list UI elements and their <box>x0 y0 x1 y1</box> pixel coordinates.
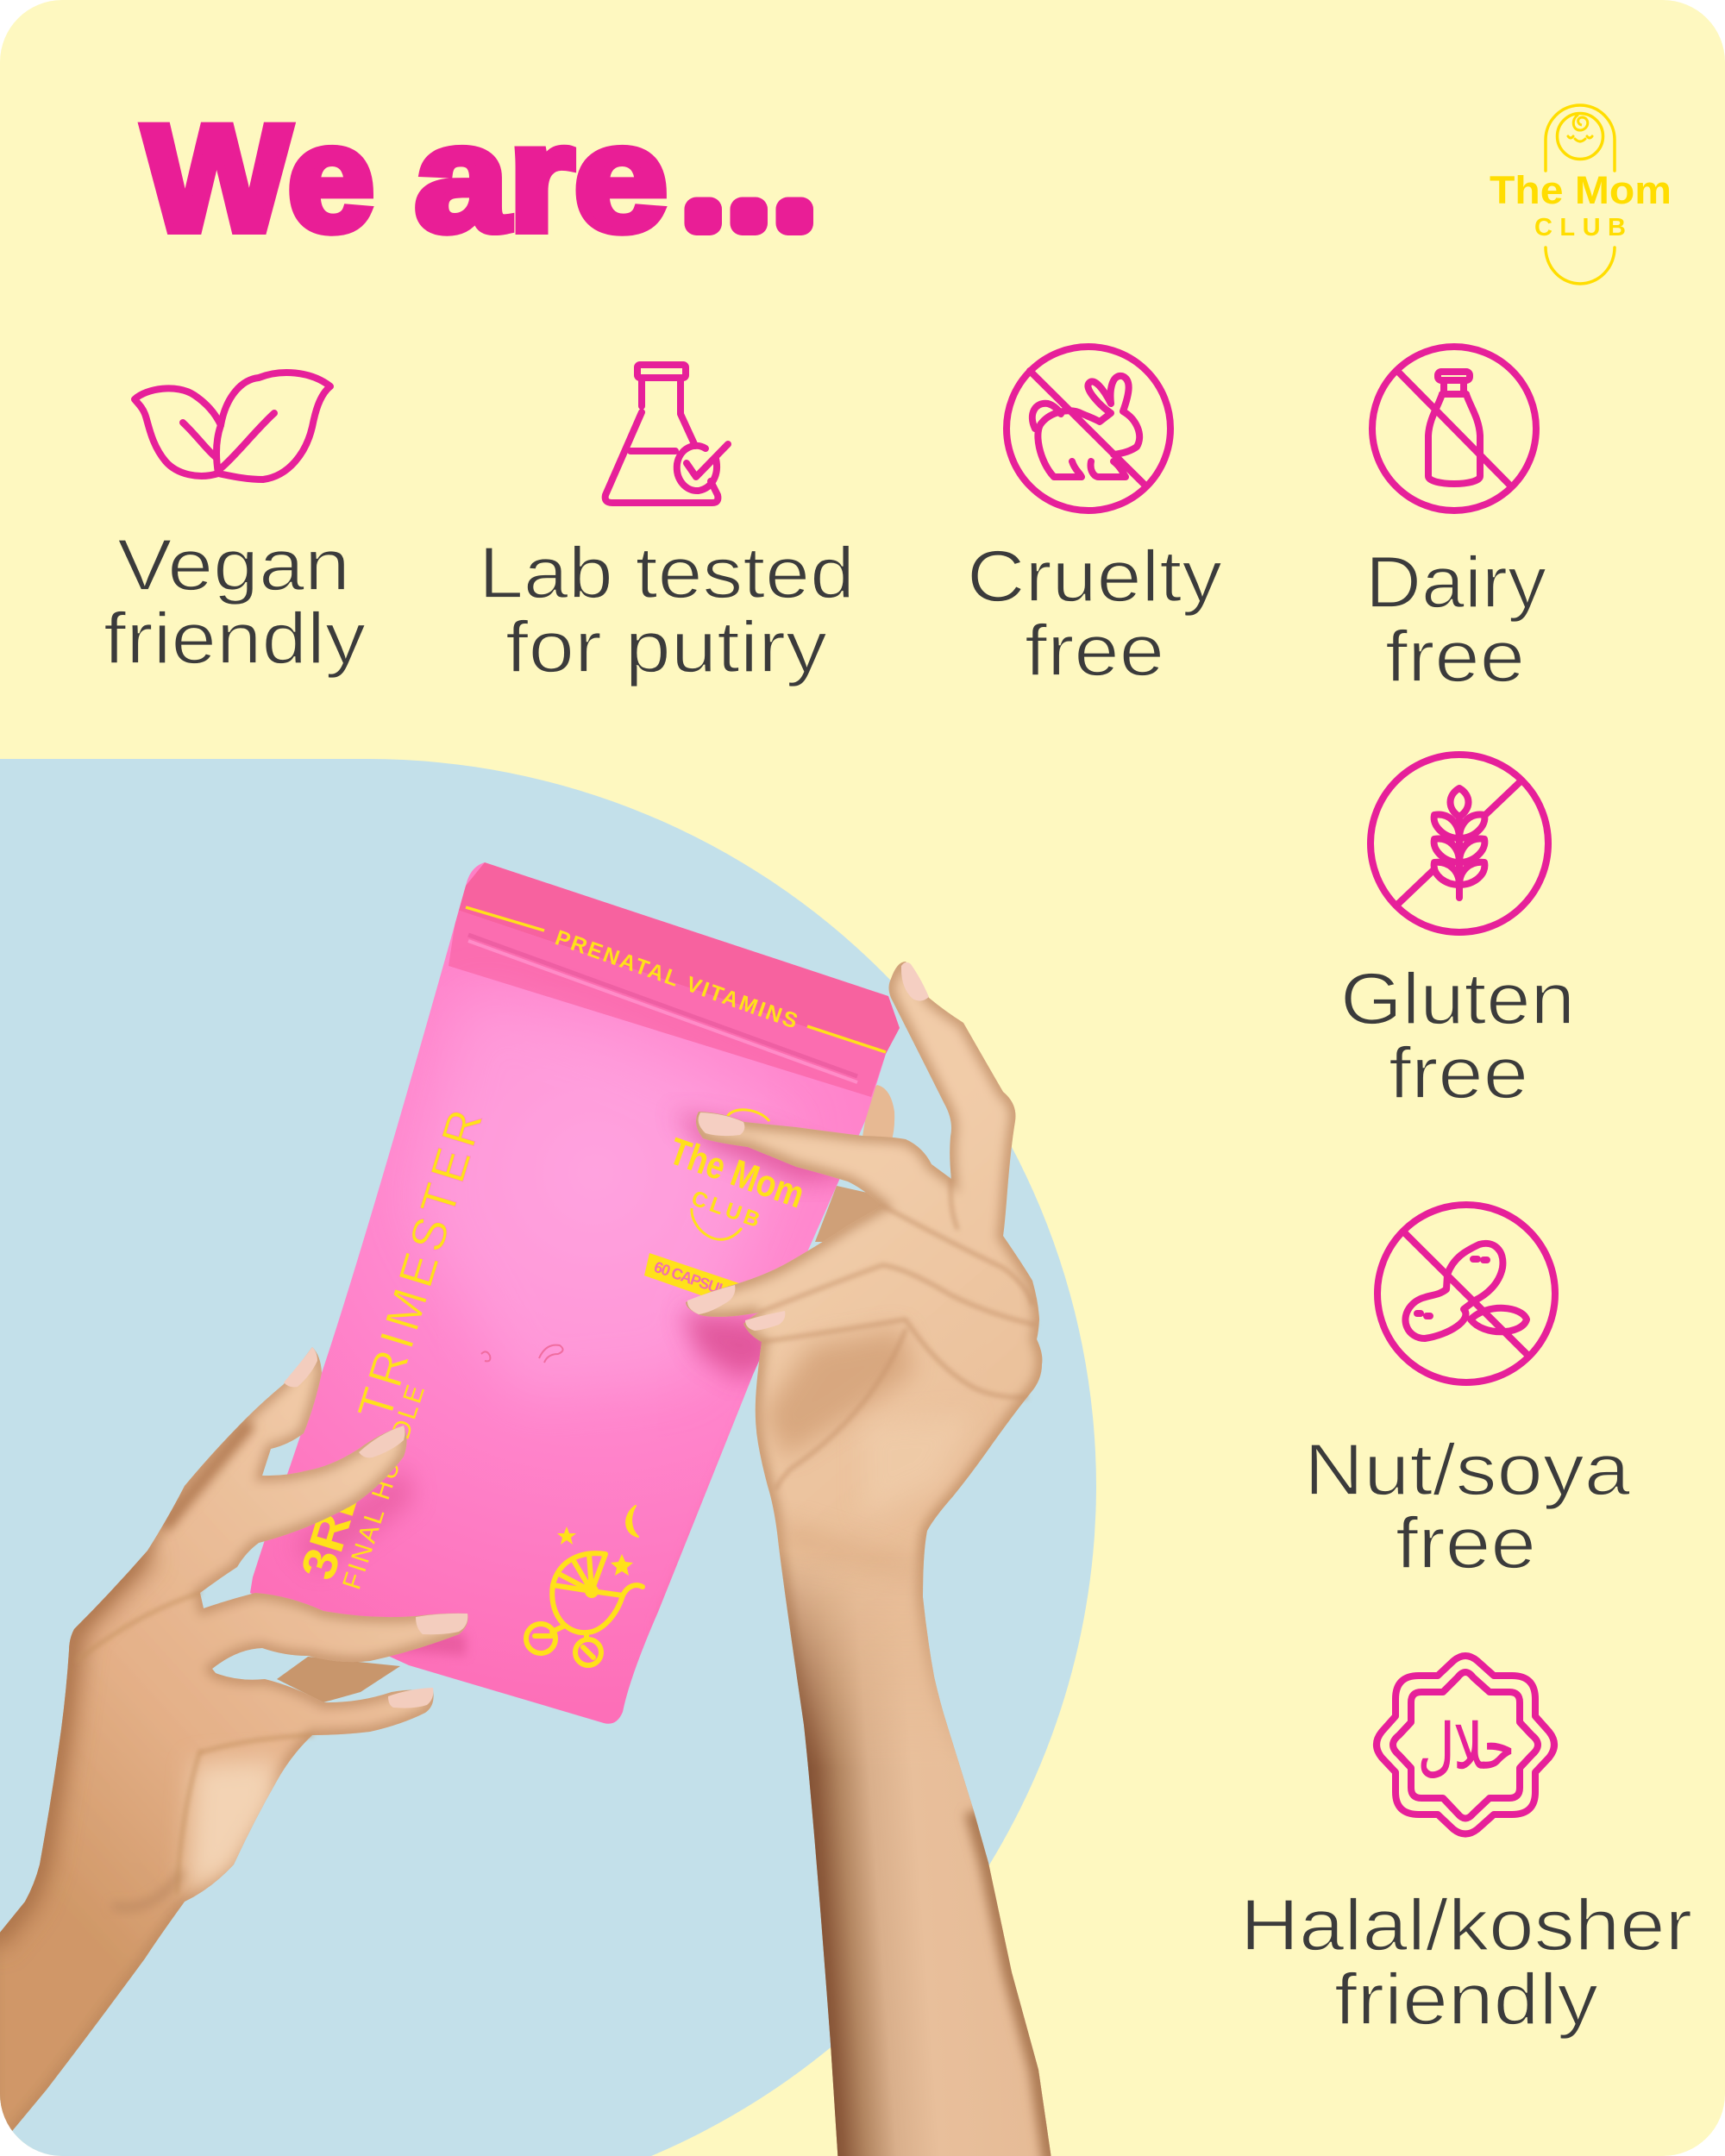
pouch text: prenatal vitamins: PRENATAL VITAMINS <box>552 925 800 1033</box>
icon: leaves <box>135 373 330 479</box>
label: Dairy <box>1365 542 1546 623</box>
icon: halal badge: حلال <box>1418 1711 1515 1783</box>
label: Cruelty <box>967 536 1222 617</box>
icon: crossed wheat <box>1371 755 1548 932</box>
title <box>138 122 813 236</box>
logo: The Mom Club: The Mom <box>1490 168 1672 212</box>
icon: crossed nuts <box>1377 1205 1555 1382</box>
label: free <box>1385 616 1525 697</box>
pouch logo <box>664 1110 810 1239</box>
pouch text: final hurdle: FINAL HURDLE <box>337 1382 430 1593</box>
hand shading <box>0 1347 468 2156</box>
item: halal and kosher friendly <box>1240 1656 1692 2040</box>
left hand <box>0 1347 468 2156</box>
item: nut and soya free <box>1304 1205 1630 1583</box>
item: dairy free <box>1365 347 1546 697</box>
icon: crossed rabbit <box>1007 347 1170 511</box>
right hand <box>686 962 1070 2156</box>
icon: crossed bottle <box>1372 347 1536 511</box>
icon: halal badge <box>1377 1656 1554 1833</box>
label: free <box>1396 1502 1536 1583</box>
pouch text: trimester: TRIMESTER <box>347 1103 492 1426</box>
pouch shading <box>293 862 900 1716</box>
label: Vegan <box>117 524 350 605</box>
product pouch <box>250 862 900 1724</box>
logo: The Mom Club: CLUB <box>1534 214 1626 241</box>
icon: pouch stroller and stars <box>526 1506 643 1665</box>
label: friendly <box>1334 1959 1598 2040</box>
finger separation lines <box>759 1179 1035 1489</box>
icon: flask <box>605 365 728 503</box>
label: for putiry <box>505 606 827 687</box>
blue circle backdrop <box>0 759 1096 2156</box>
pouch lines <box>466 907 886 1052</box>
title: We <box>143 95 374 263</box>
item: cruelty free <box>967 347 1222 691</box>
item: gluten free <box>1340 755 1575 1113</box>
hand silhouette <box>0 1347 468 2156</box>
pouch body <box>250 862 900 1724</box>
label: Halal/kosher <box>1240 1884 1692 1965</box>
pouch logo: The Mom <box>664 1130 810 1217</box>
item: vegan friendly <box>104 373 366 679</box>
item: lab tested for purity <box>479 365 855 687</box>
label <box>1304 1429 1630 1583</box>
pouch capsule tag: 60 CAPSULES <box>652 1258 747 1306</box>
label: friendly <box>104 598 366 679</box>
title: ... <box>690 138 808 244</box>
fingernails <box>687 962 929 1331</box>
label <box>1365 542 1546 697</box>
label <box>1240 1884 1692 2040</box>
pouch text: 3rd: 3RD <box>290 1470 373 1586</box>
hand shading <box>686 962 1070 2156</box>
label <box>1340 958 1575 1113</box>
hand silhouette <box>686 962 1052 2156</box>
label <box>971 548 1221 676</box>
title: are <box>415 95 668 263</box>
label: Nut/soya <box>1304 1429 1630 1510</box>
fingernails <box>284 1347 467 1708</box>
label: free <box>1025 610 1164 691</box>
hand parts behind the pouch <box>277 1085 897 1702</box>
label <box>105 540 364 678</box>
label: free <box>1389 1032 1528 1113</box>
pouch logo: CLUB <box>688 1186 763 1232</box>
finger separation lines <box>78 1593 312 1893</box>
label <box>486 545 849 686</box>
label: Gluten <box>1340 958 1575 1039</box>
label: Lab tested <box>479 532 855 613</box>
logo: The Mom Club <box>1490 105 1672 284</box>
